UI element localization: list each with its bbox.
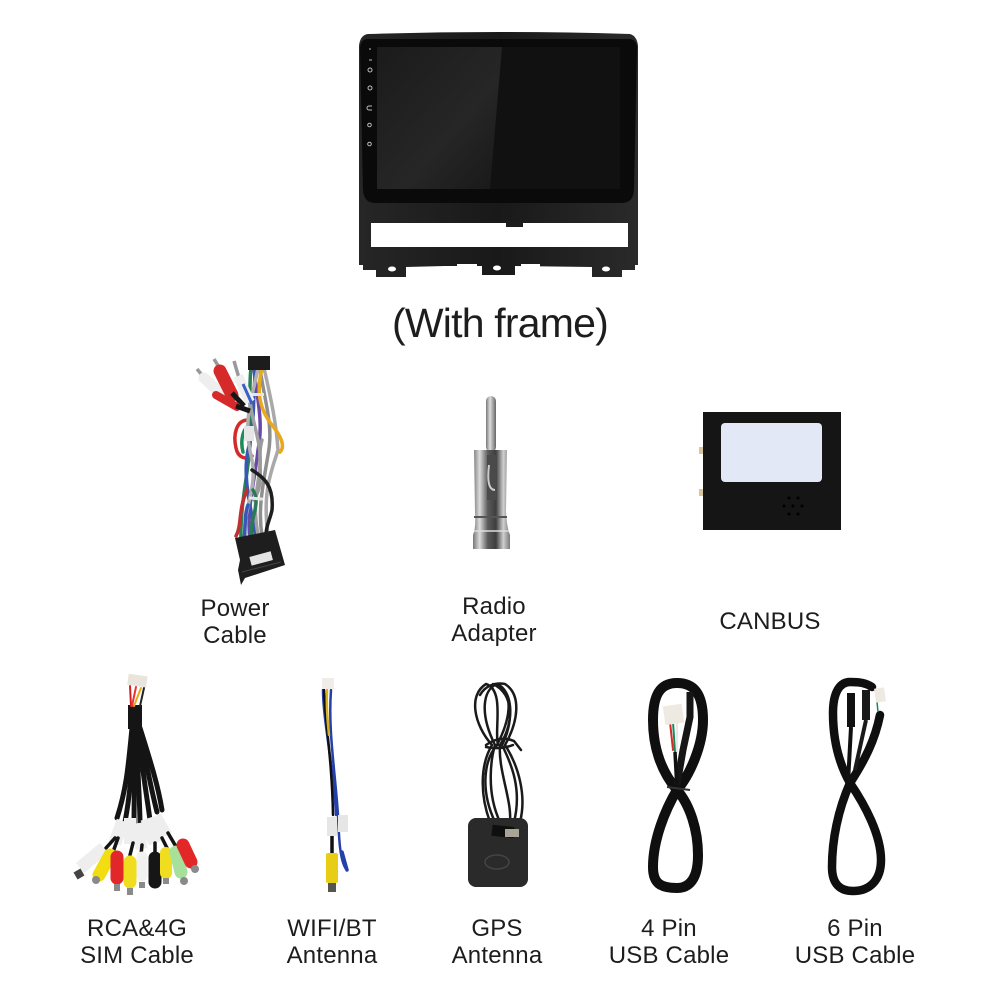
logo [485, 855, 509, 869]
white connector [663, 704, 684, 725]
icon: RCA and 4G SIM cable [74, 674, 199, 895]
head unit with frame [359, 32, 638, 277]
plugs [847, 693, 855, 727]
label: 4 pin USB cable: 4 Pin [641, 915, 697, 942]
white sticker [721, 423, 822, 482]
label: 6 pin USB cable: 6 Pin [827, 915, 883, 942]
title: (With frame) [392, 300, 608, 346]
connector wires [130, 686, 144, 706]
antenna puck [468, 818, 528, 887]
slot clip [506, 221, 523, 227]
zip ties [244, 393, 264, 501]
white tags [109, 813, 172, 850]
bottom connector [235, 530, 285, 585]
wires [670, 722, 677, 752]
icon: WIFI/BT antenna [322, 678, 348, 892]
label: 4 pin USB cable: USB Cable [609, 942, 729, 969]
top connector [248, 356, 270, 370]
label: WIFI/BT antenna: Antenna [287, 942, 378, 969]
slot opening [371, 223, 628, 247]
white connector [874, 687, 886, 703]
label: WIFI/BT antenna: WIFI/BT [287, 915, 377, 942]
label: GPS antenna: Antenna [452, 942, 543, 969]
icon: 4 pin USB cable [653, 683, 703, 888]
wires [323, 690, 346, 869]
connector pins [699, 447, 703, 454]
zip tie [667, 787, 690, 790]
tags [327, 815, 348, 836]
cable loop [653, 683, 703, 888]
side buttons [367, 49, 372, 146]
speaker holes [782, 496, 804, 516]
black cables [117, 728, 162, 825]
icon: GPS antenna [468, 683, 528, 887]
display glare [377, 47, 502, 189]
wire bundle [235, 368, 282, 540]
icon: 6 pin USB cable [832, 682, 886, 891]
coiled cable [475, 683, 522, 822]
connector label [249, 551, 273, 566]
mounting frame [359, 32, 638, 277]
label: CANBUS: CANBUS [719, 608, 821, 635]
label: power cable: Cable [203, 622, 267, 649]
cable loop [832, 682, 881, 891]
icon: power cable [197, 356, 285, 585]
white connector [127, 674, 148, 687]
icon: radio adapter [473, 396, 510, 549]
label: RCA and 4G SIM cable: SIM Cable [80, 942, 194, 969]
plug tips [92, 865, 199, 895]
sleeve [128, 705, 142, 729]
icon: CANBUS box [699, 412, 841, 530]
SIM lead [80, 848, 104, 868]
mounting holes [388, 264, 610, 272]
label: GPS antenna: GPS [471, 915, 523, 942]
screen bezel [360, 39, 637, 203]
display [377, 47, 620, 189]
connector [322, 678, 334, 689]
label: radio adapter: Adapter [451, 620, 537, 647]
label: 6 pin USB cable: USB Cable [795, 942, 915, 969]
USB plug [677, 692, 690, 785]
RCA plugs [197, 359, 252, 411]
label: radio adapter: Radio [462, 593, 526, 620]
wires [877, 702, 878, 712]
label: RCA and 4G SIM cable: RCA&4G [87, 915, 187, 942]
plug [491, 825, 514, 838]
RCA plug [326, 853, 338, 883]
lower cables [106, 833, 178, 855]
RCA plugs [99, 845, 191, 882]
label: power cable: Power [200, 595, 270, 622]
